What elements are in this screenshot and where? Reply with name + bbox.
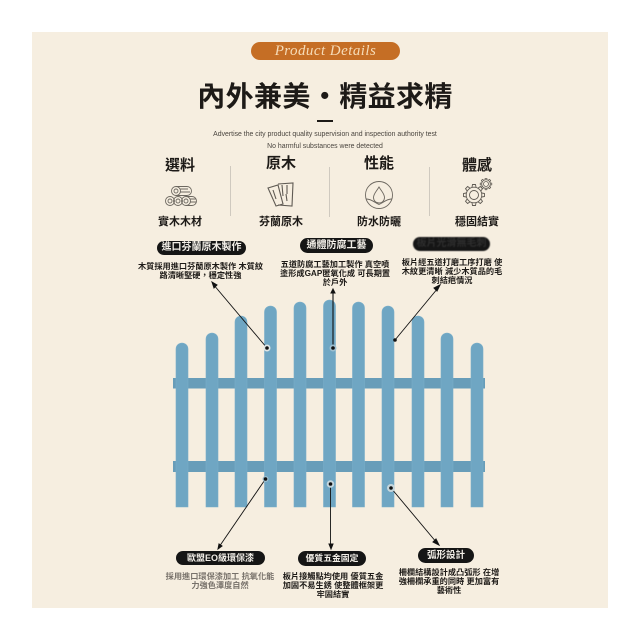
text: arc design: 柵欄結構設計成凸弧形 在增 [399,568,499,577]
text: hardware: 牢固結實 [317,590,349,599]
pill: 優質五金固定 [298,551,366,566]
pill: smudged heading: 板片光滑無毛刺 [416,238,486,249]
divider 3 [429,167,430,216]
text: imported wood: 木質採用進口芬蘭原木製作 木質紋 [138,262,263,271]
feature: 體感 [455,156,499,228]
feature heading: 體感 [462,157,492,174]
arrow: bottom left [218,476,268,549]
feature caption: 實木木材 [158,216,202,228]
arrow: top right [393,285,440,342]
title: 內外兼美・精益求精 [197,81,453,112]
pill: 優質五金固定: 優質五金固定 [306,553,358,563]
rails [173,378,485,472]
text: hardware: 板片接觸點均使用 優質五金 [283,572,383,581]
feature caption: 穩固結實 [455,216,499,228]
title underline [317,120,333,122]
text: sanding: 板片經五道打磨工序打磨 使 [402,258,502,267]
feature: 選料 [158,157,202,228]
icon: logs [165,186,197,206]
icon: water drop [365,181,393,209]
text: anti-corrosion: 塗形成GAP匿氧化成 可長期置 [280,269,390,278]
pickets [176,300,483,507]
text: sanding [402,258,502,285]
text: sanding: 刺結疤情況 [432,276,472,285]
text: paint [166,572,274,590]
divider 1 [230,166,231,216]
arrow: bottom right [387,484,439,545]
pill: 進口芬蘭原木製作: 進口芬蘭原木製作 [162,242,242,253]
text: sanding: 木紋更清晰 減少木質品的毛 [402,267,502,276]
text: anti-corrosion [280,260,390,287]
feature: 性能 [357,155,401,228]
pill: 通體防腐工藝 [300,238,373,253]
text: imported wood [138,262,263,280]
subtitle [213,130,437,150]
arrow: top left [212,282,270,352]
arrow: bottom center [327,480,334,549]
pill: 通體防腐工藝: 通體防腐工藝 [306,240,366,251]
feature heading: 原木 [266,155,296,172]
text: paint: 力強色澤度自然 [191,581,249,590]
subtitle: No harmful substances were detected [267,143,383,150]
feature caption: 芬蘭原木 [259,216,303,228]
pill: 弧形設計: 弧形設計 [427,550,465,561]
text: paint: 採用進口環保漆加工 抗氧化能 [166,572,274,581]
pill: 歐盟EO級環保漆: 歐盟EO級環保漆 [187,553,254,563]
feature caption: 防水防曬 [357,216,401,228]
text: hardware: 加固不易生銹 使整體框架更 [283,581,383,590]
badge: Product Details [251,42,400,60]
text: anti-corrosion: 五道防腐工藝加工製作 真空噴 [281,260,389,269]
pill: 弧形設計 [418,548,474,563]
text: hardware [282,572,384,599]
feature: 原木 [259,155,303,228]
text: arc design: 藝術性 [437,586,461,595]
text: imported wood: 路清晰堅硬，穩定性強 [160,271,241,280]
text: arc design [399,568,499,595]
divider 2 [329,167,330,217]
pill: 歐盟EO級環保漆 [176,551,265,565]
text: anti-corrosion: 於戶外 [323,278,347,287]
subtitle: Advertise the city product quality supervision and inspection authority test [213,131,437,138]
feature heading: 性能 [364,155,394,172]
feature heading: 選料 [165,157,195,174]
icon: wood boards [267,182,294,207]
arrow: top center [330,289,336,352]
text: arc design: 強柵欄承重的同時 更加富有 [399,577,499,586]
icon: gears [463,178,492,206]
badge: Product Details: Product Details [275,43,376,59]
